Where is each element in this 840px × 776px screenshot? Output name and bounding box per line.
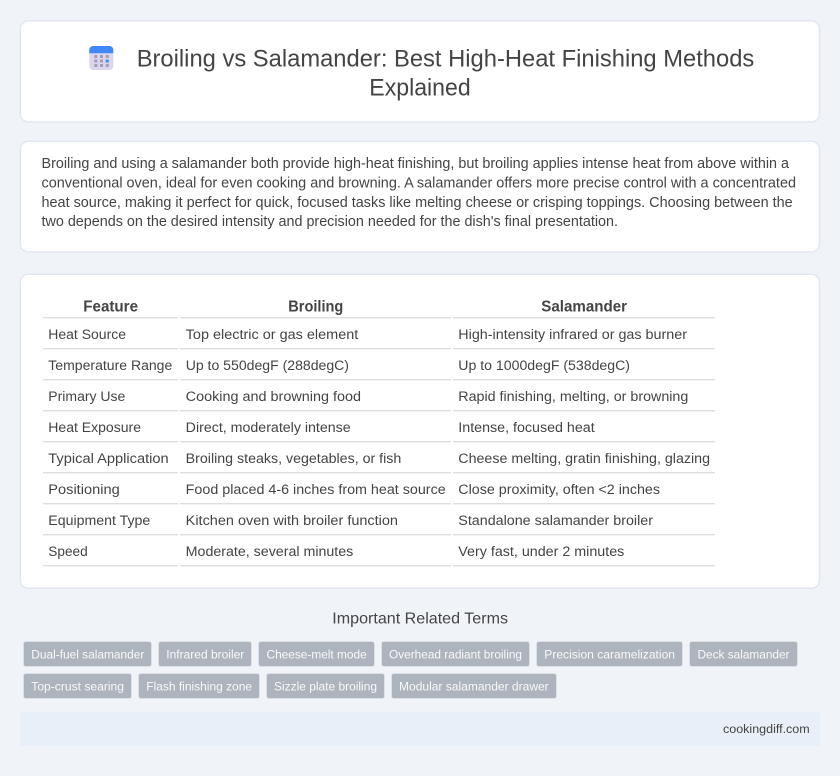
icon: calendar grid — [89, 46, 113, 70]
row: positioning: Positioning — [48, 482, 120, 498]
summary text: heat source, making it perfect for quick, focused tasks like melting cheese or crisping toppings. Choosing between the — [42, 195, 793, 211]
panel: summary — [20, 141, 820, 252]
row: positioning — [43, 482, 715, 504]
row: positioning: Close proximity, often <2 inches — [458, 482, 660, 498]
chip: infrared broiler — [158, 642, 252, 666]
row: temperature range: Temperature Range — [48, 358, 172, 374]
summary text: Broiling and using a salamander both provide high-heat finishing, but broiling applies intense heat from above within a — [42, 156, 789, 172]
row: typical application: Cheese melting, gratin finishing, glazing — [458, 451, 710, 467]
row: primary use: Primary Use — [48, 389, 125, 405]
chip: cheese-melt mode: Cheese-melt mode — [266, 647, 367, 661]
row: primary use: Rapid finishing, melting, or browning — [458, 389, 688, 405]
summary text — [42, 156, 796, 230]
row: temperature range: Up to 550degF (288degC) — [186, 358, 349, 374]
chip: dual-fuel salamander: Dual-fuel salamander — [31, 647, 144, 661]
row: speed: Very fast, under 2 minutes — [458, 544, 624, 560]
chip: precision caramelization — [536, 642, 682, 666]
chip: precision caramelization: Precision caramelization — [544, 647, 675, 661]
chip: infrared broiler: Infrared broiler — [166, 647, 244, 661]
chip: overhead radiant broiling: Overhead radiant broiling — [389, 647, 522, 661]
header panel — [20, 21, 820, 122]
chip: deck salamander — [690, 642, 798, 666]
row: equipment type — [43, 513, 715, 535]
chip: sizzle plate broiling: Sizzle plate broiling — [274, 679, 377, 693]
chip: deck salamander: Deck salamander — [698, 647, 790, 661]
table header row — [43, 298, 715, 318]
chip: flash finishing zone: Flash finishing zone — [146, 679, 252, 693]
chip: flash finishing zone — [138, 674, 260, 698]
footer bar — [20, 712, 820, 746]
chip: sizzle plate broiling — [266, 674, 384, 698]
row: heat source: Top electric or gas element — [186, 327, 358, 343]
chip: top-crust searing — [24, 674, 132, 698]
chip: top-crust searing: Top-crust searing — [31, 679, 124, 693]
row: typical application — [43, 451, 715, 473]
summary text: conventional oven, ideal for even cooking and browning. A salamander offers more precise control with a concentrated — [42, 176, 796, 192]
row: temperature range — [43, 358, 715, 380]
row: temperature range: Up to 1000degF (538degC) — [458, 358, 630, 374]
table header row: Feature — [83, 298, 138, 316]
row: positioning: Food placed 4-6 inches from heat source — [186, 482, 446, 498]
footer source text: cookingdiff.com — [723, 722, 810, 736]
row: primary use: Cooking and browning food — [186, 389, 361, 405]
row: typical application: Broiling steaks, vegetables, or fish — [186, 451, 401, 467]
title: Broiling vs Salamander: Best High-Heat Finishing Methods — [137, 46, 754, 72]
row: equipment type: Equipment Type — [48, 513, 150, 529]
table header row: Broiling — [288, 298, 343, 316]
chip: modular salamander drawer: Modular salamander drawer — [399, 679, 549, 693]
row: equipment type: Standalone salamander broiler — [458, 513, 653, 529]
chip: dual-fuel salamander — [24, 642, 152, 666]
row: speed: Speed — [48, 544, 88, 560]
summary text: two depends on the desired intensity and precision needed for the dish's final presentation. — [42, 214, 618, 230]
title — [137, 46, 754, 102]
row: speed: Moderate, several minutes — [186, 544, 353, 560]
row: heat exposure — [43, 420, 715, 442]
chip: overhead radiant broiling — [382, 642, 530, 666]
row: heat exposure: Intense, focused heat — [458, 420, 595, 436]
chip: cheese-melt mode — [258, 642, 374, 666]
row: speed — [43, 544, 715, 566]
title: Explained — [369, 74, 471, 102]
row: heat exposure: Heat Exposure — [48, 420, 141, 436]
related term chips — [24, 642, 798, 698]
row: heat source: Heat Source — [48, 327, 126, 343]
table header row: Salamander — [541, 298, 627, 316]
panel: comparison table — [20, 274, 820, 588]
row: equipment type: Kitchen oven with broiler function — [186, 513, 398, 529]
heading: related terms: Important Related Terms — [332, 610, 508, 628]
row: heat source — [43, 327, 715, 349]
row: typical application: Typical Application — [48, 451, 169, 467]
chip: modular salamander drawer — [392, 674, 556, 698]
row: primary use — [43, 389, 715, 411]
row: heat source: High-intensity infrared or gas burner — [458, 327, 687, 343]
row: heat exposure: Direct, moderately intense — [186, 420, 351, 436]
